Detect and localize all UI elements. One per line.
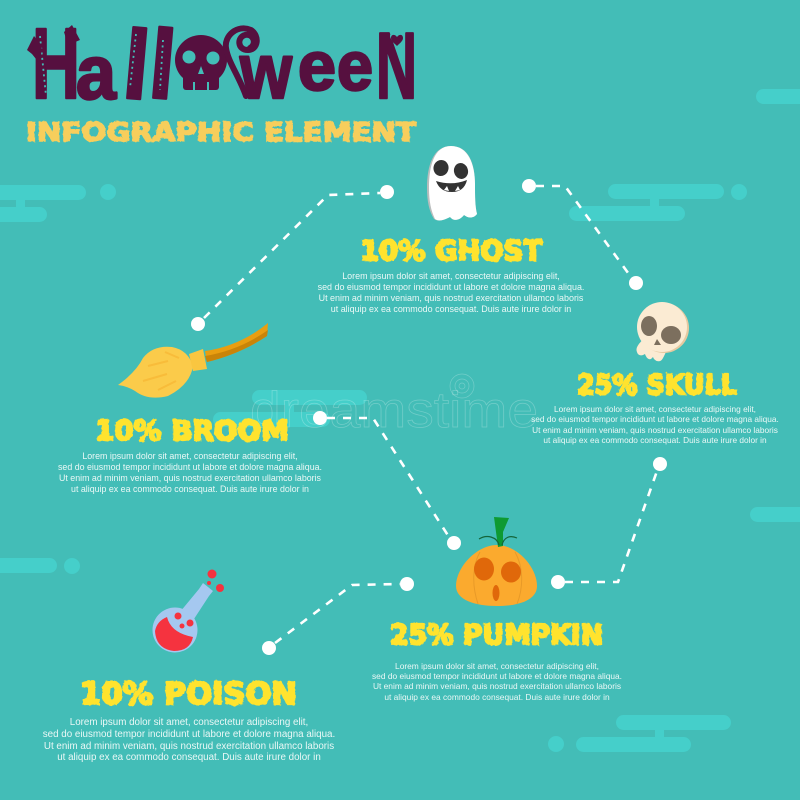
text: skull [531,404,779,445]
title swirl [226,28,257,96]
icon: pumpkin [456,517,537,606]
heading: pumpkin: 25% PUMPKIN [390,618,603,651]
heading: poison: 10% POISON [80,677,297,712]
icon: ghost [427,146,477,220]
icon: skull [637,302,689,361]
text: skull: Lorem ipsum dolor sit amet, consectetur adipiscing elit, [554,404,756,414]
title: l [145,8,180,120]
watermark: dreamstime [250,382,538,438]
text: broom: Lorem ipsum dolor sit amet, consectetur adipiscing elit, [82,451,298,461]
text: poison: sed do eiusmod tempor incididunt ut labore et dolore magna aliqua. [43,729,335,740]
title bat wing [27,25,80,64]
title: l [119,9,154,121]
icon: broom [118,323,268,398]
text: skull: ut aliquip ex ea commodo consequat. Duis aute irure dolor in [543,435,767,445]
connector: pumpkin to skull [551,457,667,589]
connector: ghost to skull [522,179,643,290]
text: broom: ut aliquip ex ea commodo consequat. Duis aute irure dolor in [71,484,309,494]
connector: broom to pumpkin [313,411,461,550]
title skull letter [175,35,227,90]
heading: skull: 25% SKULL [577,368,737,401]
title heart [390,33,404,46]
title: N [376,13,417,118]
text: poison: Lorem ipsum dolor sit amet, consectetur adipiscing elit, [70,717,308,728]
text: pumpkin [372,661,622,702]
title dots [40,34,163,96]
text: poison: ut aliquip ex ea commodo consequat. Duis aute irure dolor in [57,752,321,763]
icon: poison flask [152,570,224,652]
connector: ghost to broom [191,185,394,331]
text: ghost: Ut enim ad minim veniam, quis nostrud exercitation ullamco laboris [319,293,584,303]
text: skull: sed do eiusmod tempor incididunt ut labore et dolore magna aliqua. [531,414,779,424]
text: poison: Ut enim ad minim veniam, quis nostrud exercitation ullamco laboris [44,741,334,752]
text: pumpkin: sed do eiusmod tempor incididunt ut labore et dolore magna aliqua. [372,671,622,681]
title: e [298,27,336,105]
text: broom: Ut enim ad minim veniam, quis nostrud exercitation ullamco laboris [59,473,322,483]
text: pumpkin: Lorem ipsum dolor sit amet, consectetur adipiscing elit, [395,661,599,671]
title: H [32,8,80,120]
text: poison [43,717,335,763]
text: pumpkin: ut aliquip ex ea commodo consequat. Duis aute irure dolor in [384,692,610,702]
title: w [239,27,292,115]
connector: poison to pumpkin [262,577,414,655]
text: ghost [318,271,584,314]
text: pumpkin: Ut enim ad minim veniam, quis nostrud exercitation ullamco laboris [373,681,621,691]
text: broom [58,451,322,494]
heading: ghost: 10% GHOST [360,234,542,267]
text: ghost: sed do eiusmod tempor incididunt ut labore et dolore magna aliqua. [318,282,584,292]
text: ghost: ut aliquip ex ea commodo consequat. Duis aute irure dolor in [331,304,571,314]
text: skull: Ut enim ad minim veniam, quis nostrud exercitation ullamco laboris [532,425,778,435]
subtitle: INFOGRAPHIC ELEMENT [26,118,416,148]
title: a [76,31,117,116]
text: ghost: Lorem ipsum dolor sit amet, consectetur adipiscing elit, [342,271,560,281]
title [27,8,417,121]
heading: broom: 10% BROOM [95,414,289,447]
title: e [337,27,373,105]
text: broom: sed do eiusmod tempor incididunt ut labore et dolore magna aliqua. [58,462,322,472]
